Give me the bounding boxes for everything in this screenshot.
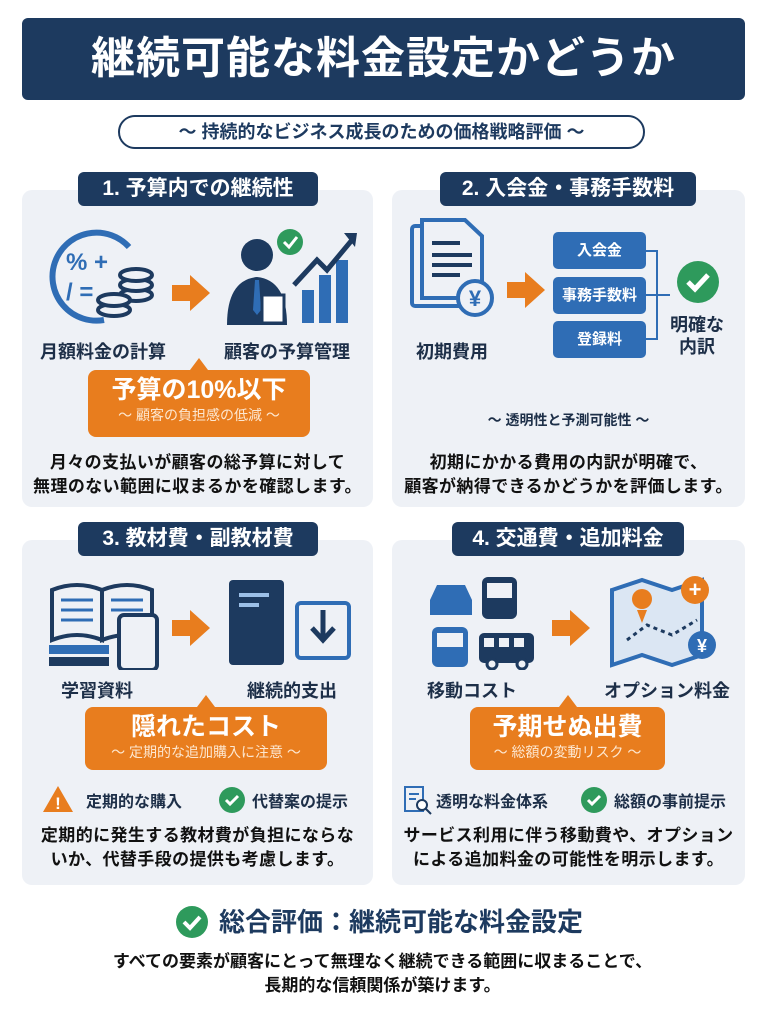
callout: 予算の10%以下 bbox=[111, 376, 287, 404]
callout: 〜 総額の変動リスク 〜 bbox=[494, 744, 641, 760]
label: study materials: 学習資料 bbox=[61, 681, 133, 701]
arrow bbox=[552, 610, 590, 646]
heading: panel 3: 3. 教材費・副教材費 bbox=[102, 527, 294, 550]
heading: panel 1: 1. 予算内での継続性 bbox=[102, 177, 294, 200]
icon: calculator coins bbox=[50, 230, 154, 324]
description: サービス利用に伴う移動費や、オプション bbox=[403, 826, 734, 845]
icon: books tablet bbox=[49, 583, 159, 670]
icon: businessman chart bbox=[227, 229, 357, 325]
callout bbox=[470, 707, 665, 770]
description: 初期にかかる費用の内訳が明確で、 bbox=[430, 453, 707, 472]
badges: 定期的な購入 bbox=[86, 794, 182, 811]
icon: map plus yen bbox=[610, 576, 716, 668]
heading: panel 2: 2. 入会金・事務手数料 bbox=[462, 177, 674, 200]
icon: map plus yen: + bbox=[689, 577, 701, 602]
callout: 隠れたコスト bbox=[131, 713, 281, 741]
title: 継続可能な料金設定かどうか bbox=[91, 34, 676, 83]
subtitle bbox=[118, 115, 645, 149]
icon: vehicles bbox=[430, 577, 534, 670]
panel: 3 materials bbox=[22, 540, 373, 885]
summary description: すべての要素が顧客にとって無理なく継続できる範囲に収まることで、 bbox=[113, 952, 652, 971]
icon: calculator coins: / = bbox=[66, 279, 93, 306]
heading: panel 4 bbox=[452, 522, 684, 556]
summary description bbox=[113, 952, 652, 995]
fee boxes: 事務手数料 bbox=[562, 287, 637, 304]
panel: 2 fees bbox=[392, 190, 745, 507]
description: 顧客が納得できるかどうかを評価します。 bbox=[404, 477, 733, 496]
icon: book download bbox=[229, 580, 351, 665]
description bbox=[404, 453, 733, 496]
callout: 〜 定期的な追加購入に注意 〜 bbox=[111, 744, 301, 760]
fee boxes: 入会金 bbox=[577, 242, 622, 259]
label: clear breakdown: 明確な bbox=[670, 315, 724, 335]
badges: 代替案の提示 bbox=[252, 794, 348, 811]
callout: 〜 顧客の負担感の低減 〜 bbox=[118, 407, 280, 423]
badges bbox=[404, 786, 726, 815]
label: budget management: 顧客の予算管理 bbox=[224, 342, 350, 362]
description bbox=[403, 826, 734, 869]
description: 月々の支払いが顧客の総予算に対して bbox=[50, 453, 345, 472]
icon: document yen: ¥ bbox=[469, 286, 482, 311]
title bbox=[22, 18, 745, 100]
description: いか、代替手段の提供も考慮します。 bbox=[51, 850, 344, 869]
arrow bbox=[172, 610, 210, 646]
subtext: 〜 透明性と予測可能性 〜 bbox=[488, 412, 649, 428]
label: travel costs: 移動コスト bbox=[427, 681, 517, 701]
panel: 4 transport bbox=[392, 540, 745, 885]
icon: calculator coins: % + bbox=[66, 249, 108, 276]
icon: document yen bbox=[410, 218, 494, 317]
label: continuous spending: 継続的支出 bbox=[247, 681, 337, 701]
fee boxes bbox=[553, 232, 670, 358]
heading: panel 2 bbox=[440, 172, 696, 206]
callout bbox=[85, 707, 327, 770]
heading: panel 3 bbox=[78, 522, 318, 556]
panel: 1 budget bbox=[22, 190, 373, 507]
label: clear breakdown: 内訳 bbox=[679, 337, 715, 357]
label: initial cost: 初期費用 bbox=[416, 342, 488, 362]
callout: 予期せぬ出費 bbox=[492, 713, 642, 741]
description: 定期的に発生する教材費が負担にならな bbox=[41, 826, 354, 845]
summary description: 長期的な信頼関係が築けます。 bbox=[264, 976, 501, 995]
badges: 透明な料金体系 bbox=[436, 794, 548, 811]
badges bbox=[43, 786, 348, 813]
icon: map plus yen: ¥ bbox=[697, 636, 707, 656]
label: monthly fee: 月額料金の計算 bbox=[40, 342, 166, 362]
badges: 総額の事前提示 bbox=[614, 794, 726, 811]
arrow bbox=[507, 272, 545, 308]
heading: panel 4: 4. 交通費・追加料金 bbox=[472, 527, 664, 550]
label: clear breakdown bbox=[670, 315, 724, 357]
callout bbox=[88, 370, 310, 437]
badges: ! bbox=[55, 794, 61, 813]
subtitle: 〜 持続的なビジネス成長のための価格戦略評価 〜 bbox=[178, 122, 584, 142]
description: 無理のない範囲に収まるかを確認します。 bbox=[33, 477, 362, 496]
description: による追加料金の可能性を明示します。 bbox=[413, 850, 724, 869]
summary heading: 総合評価：継続可能な料金設定 bbox=[219, 907, 583, 937]
icon: check bbox=[677, 261, 719, 303]
description bbox=[41, 826, 354, 869]
description bbox=[33, 453, 362, 496]
fee boxes: 登録料 bbox=[577, 331, 622, 348]
label: option fees: オプション料金 bbox=[604, 681, 730, 701]
heading: panel 1 bbox=[78, 172, 318, 206]
arrow bbox=[172, 275, 210, 311]
icon: check bbox=[176, 906, 208, 938]
